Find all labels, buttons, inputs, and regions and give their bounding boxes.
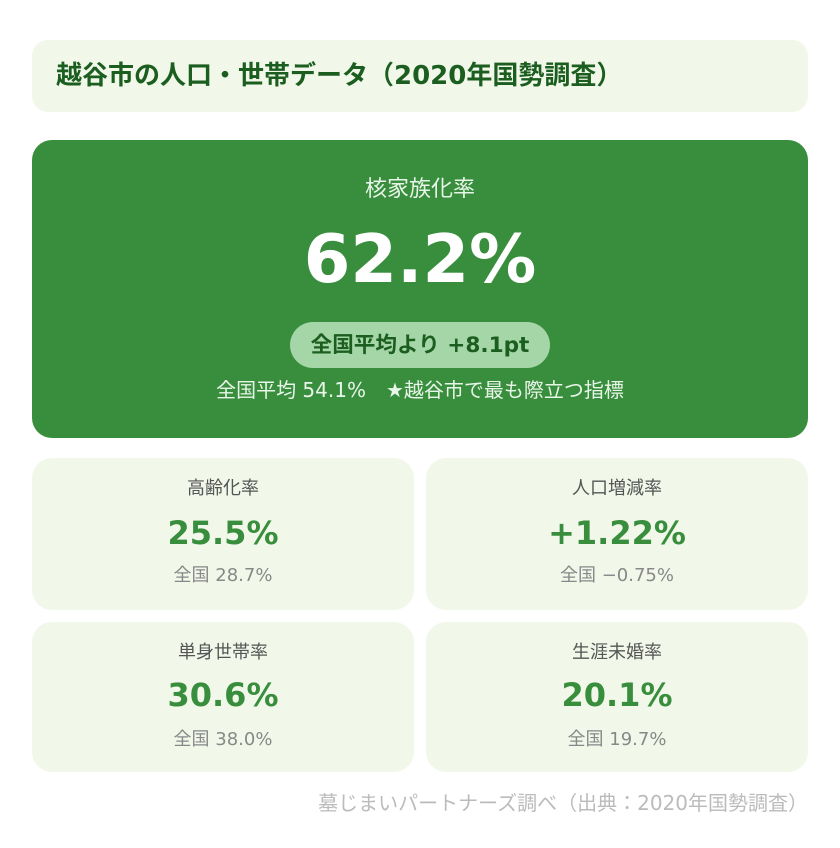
panel: aging rate: [32, 458, 414, 610]
national comparison: 全国 19.7%: [568, 729, 666, 750]
hero note: 全国平均 54.1% ★越谷市で最も際立つ指標: [216, 378, 624, 402]
panel: lifetime unmarried rate: [426, 622, 808, 772]
badge: difference from national average: [290, 322, 550, 368]
national comparison: 全国 38.0%: [174, 729, 272, 750]
hero value: 62.2%: [304, 220, 536, 298]
hero label: 核家族化率: [365, 177, 475, 202]
panel: population change: [426, 458, 808, 610]
label: 人口増減率: [572, 478, 662, 499]
panel: hero metric: [32, 140, 808, 438]
value: 25.5%: [167, 514, 278, 552]
label: 単身世帯率: [178, 642, 268, 663]
value: 30.6%: [167, 676, 278, 714]
value: +1.22%: [548, 514, 686, 552]
title banner: [32, 40, 808, 112]
badge: difference from national average: 全国平均より +8.1pt: [311, 333, 529, 358]
label: 生涯未婚率: [572, 642, 662, 663]
label: 高齢化率: [187, 478, 259, 499]
panel: single household rate: [32, 622, 414, 772]
national comparison: 全国 28.7%: [174, 565, 272, 586]
national comparison: 全国 −0.75%: [560, 565, 674, 586]
title text: 越谷市の人口・世帯データ（2020年国勢調査）: [56, 61, 622, 91]
source note: 墓じまいパートナーズ調べ（出典：2020年国勢調査）: [318, 791, 808, 815]
value: 20.1%: [561, 676, 672, 714]
